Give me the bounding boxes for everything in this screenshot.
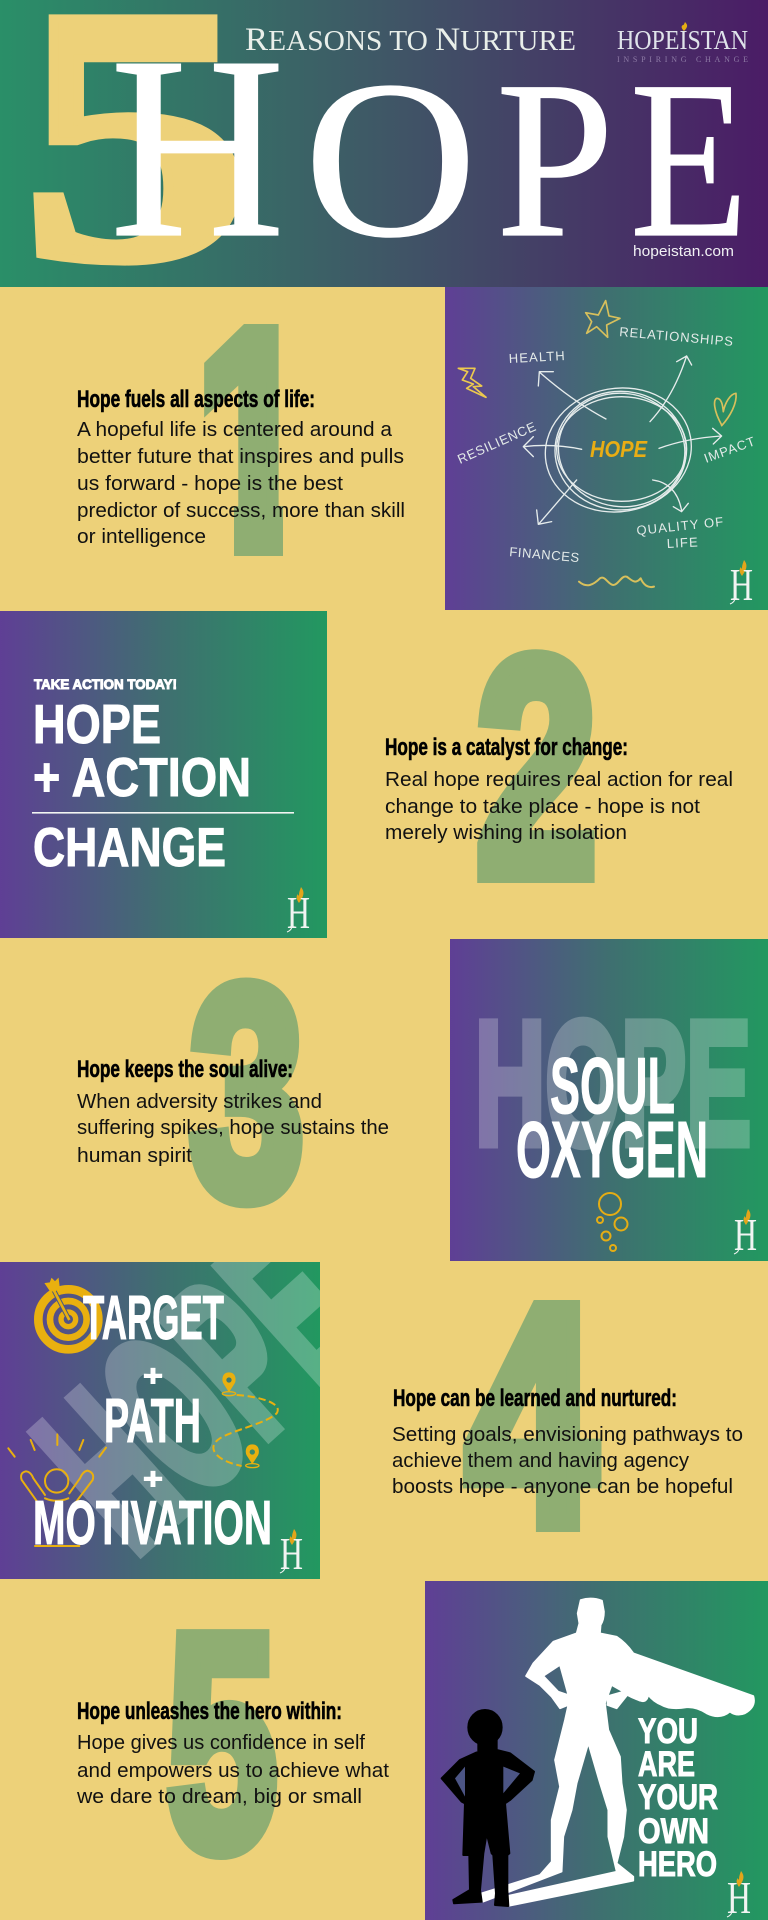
- hero shadow silhouette: [482, 1598, 754, 1906]
- scribble circle and arrows: [523, 356, 722, 524]
- text block: reason 3: suffering spikes, hope sustains the: [77, 1117, 389, 1139]
- text block: reason 5: Hope gives us confidence in self: [77, 1732, 365, 1754]
- logo mark: [280, 1528, 303, 1579]
- numeral 5: 5: [167, 1572, 277, 1913]
- Hopeistan logo: [617, 22, 748, 64]
- text block: reason 2: merely wishing in isolation: [385, 822, 627, 844]
- title stack: +: [143, 1463, 163, 1496]
- text block: reason 2: change to take place - hope is not: [385, 796, 700, 818]
- soul oxygen title: [516, 1041, 708, 1194]
- text block: reason 4: Setting goals, envisioning pathways to: [392, 1424, 743, 1446]
- mind map labels: QUALITY OF: [636, 514, 725, 538]
- slogan: [638, 1712, 718, 1884]
- mind map labels: [455, 324, 758, 565]
- text block: reason 3: [77, 1056, 389, 1167]
- text block: reason 1: better future that inspires and pulls: [77, 446, 404, 468]
- icon: target with arrow: [38, 1278, 98, 1349]
- equation text: CHANGE: [33, 816, 226, 878]
- logo mark: H: [730, 559, 753, 610]
- mind map labels: HEALTH: [508, 348, 566, 366]
- soul oxygen title: SOUL: [550, 1041, 675, 1130]
- tagline: TAKE ACTION TODAY!: [34, 676, 177, 692]
- text block: reason 4: [392, 1385, 743, 1498]
- slogan: HERO: [638, 1845, 717, 1884]
- text block: reason 1: or intelligence: [77, 526, 206, 548]
- slogan: YOU: [638, 1712, 698, 1751]
- Hopeistan logo: HOPEISTAN: [617, 25, 748, 55]
- logo mark: H: [287, 887, 310, 938]
- diagonal ghost word HOPE: HOPE: [0, 1185, 408, 1595]
- text block: reason 1: us forward - hope is the best: [77, 473, 343, 495]
- header banner: [0, 0, 768, 338]
- slogan: ARE: [638, 1745, 695, 1784]
- text block: reason 4: achieve them and having agency: [392, 1450, 689, 1472]
- slogan: OWN: [638, 1812, 709, 1851]
- text block: reason 2: Real hope requires real action for real: [385, 769, 733, 791]
- mind map labels: RESILIENCE: [455, 418, 539, 467]
- mind map labels: FINANCES: [509, 544, 581, 565]
- logo mark: [730, 559, 753, 610]
- text block: reason 5: and empowers us to achieve what: [77, 1760, 389, 1782]
- doodles: star, bolt, heart, wave: [458, 301, 736, 587]
- title word HOPE: [110, 3, 748, 292]
- text block: reason 3: human spirit: [77, 1145, 192, 1167]
- numeral 1: 1: [196, 265, 311, 613]
- text block: reason 1: Hope fuels all aspects of life:: [77, 386, 315, 413]
- text block: reason 1: A hopeful life is centered around a: [77, 419, 393, 441]
- title stack: TARGET: [83, 1284, 224, 1353]
- mind map labels: RELATIONSHIPS: [619, 324, 735, 349]
- title word HOPE: H: [110, 3, 285, 292]
- mind map labels: HOPE: [590, 436, 648, 462]
- title word HOPE: O: [304, 34, 477, 284]
- text block: reason 2: [385, 734, 733, 844]
- text block: reason 4: boosts hope - anyone can be hopeful: [392, 1476, 733, 1498]
- panel 3: soul oxygen: [450, 939, 768, 1261]
- icon: bubbles: [597, 1193, 628, 1251]
- Hopeistan logo: INSPIRING CHANGE: [617, 55, 748, 64]
- title stack: PATH: [104, 1387, 201, 1456]
- title stack: +: [143, 1360, 163, 1393]
- equation text: + ACTION: [33, 746, 251, 808]
- numeral 2: 2: [476, 595, 597, 940]
- logo mark: [287, 887, 310, 938]
- slogan: YOUR: [638, 1778, 718, 1817]
- logo mark: [734, 1209, 757, 1260]
- icon: cheering person: [8, 1434, 106, 1546]
- panel 4: target + path + motivation: [0, 1262, 320, 1579]
- website: hopeistan.com: [633, 243, 734, 260]
- equation text: HOPE: [33, 693, 161, 755]
- child silhouette: [442, 1710, 534, 1906]
- text block: reason 3: Hope keeps the soul alive:: [77, 1056, 293, 1083]
- subtitle: REASONS TO NURTURE: [245, 22, 576, 58]
- mind map labels: LIFE: [666, 534, 699, 551]
- text block: reason 2: Hope is a catalyst for change:: [385, 734, 628, 761]
- title stack: [33, 1284, 272, 1558]
- text block: reason 3: When adversity strikes and: [77, 1091, 322, 1113]
- text block: reason 5: [76, 1698, 389, 1808]
- panel 2: hope + action = change: [0, 611, 327, 938]
- numeral 3: 3: [190, 924, 304, 1260]
- logo mark: H: [280, 1528, 303, 1579]
- panel 1: hope mind map: [445, 287, 768, 610]
- mind map labels: IMPACT: [702, 433, 758, 466]
- text block: reason 1: [77, 386, 405, 548]
- icon: route with pins: [213, 1372, 278, 1468]
- panel 5: you are your own hero: [425, 1581, 768, 1920]
- title word HOPE: P: [496, 34, 614, 284]
- numeral 4: 4: [466, 1241, 597, 1589]
- text block: reason 5: we dare to dream, big or small: [76, 1786, 362, 1808]
- equation text: [32, 693, 294, 878]
- title word HOPE: E: [630, 34, 748, 284]
- text block: reason 1: predictor of success, more than skill: [77, 500, 405, 522]
- text block: reason 5: Hope unleashes the hero within:: [77, 1698, 342, 1725]
- title stack: MOTIVATION: [33, 1489, 272, 1558]
- logo mark: H: [734, 1209, 757, 1260]
